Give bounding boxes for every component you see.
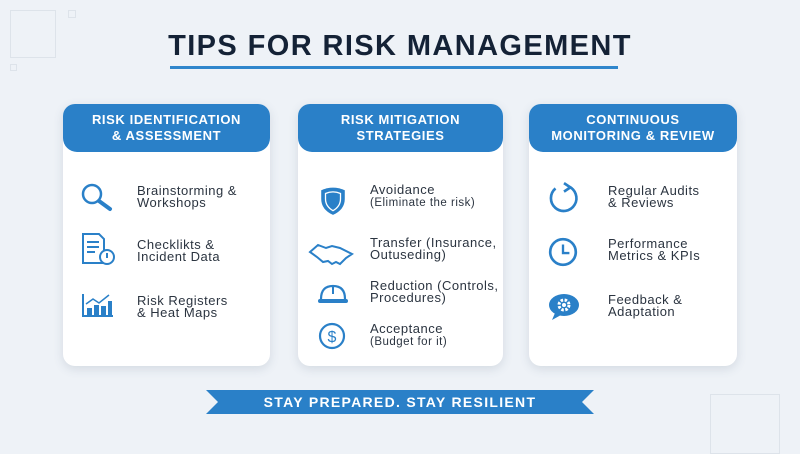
icon: clock bbox=[548, 238, 578, 266]
item text: Procedures) bbox=[370, 290, 446, 305]
item text: Reduction (Controls, bbox=[370, 278, 498, 293]
icon: document bbox=[82, 233, 115, 265]
header: CONTINUOUS bbox=[586, 112, 680, 127]
item text bbox=[137, 183, 237, 210]
icon: gear bubble bbox=[549, 294, 579, 320]
icon: magnifier bbox=[82, 184, 112, 212]
header bbox=[529, 104, 737, 152]
header: RISK IDENTIFICATION bbox=[92, 112, 241, 127]
header bbox=[298, 104, 503, 152]
panel: monitoring bbox=[529, 104, 737, 366]
item text: Incident Data bbox=[137, 249, 220, 264]
header: MONITORING & REVIEW bbox=[551, 128, 715, 143]
item text: Outuseding) bbox=[370, 247, 446, 262]
title underline bbox=[170, 66, 618, 69]
item text: Metrics & KPIs bbox=[608, 248, 700, 263]
item text: Checklikts & bbox=[137, 237, 215, 252]
item text: Adaptation bbox=[608, 304, 675, 319]
header: & ASSESSMENT bbox=[112, 128, 221, 143]
item text: Transfer (Insurance, bbox=[370, 235, 497, 250]
item text bbox=[608, 183, 700, 210]
item text: Workshops bbox=[137, 195, 206, 210]
item text bbox=[370, 235, 497, 262]
banner: STAY PREPARED. STAY RESILIENT bbox=[264, 394, 536, 410]
item text bbox=[370, 182, 475, 209]
icon: handshake bbox=[308, 244, 354, 266]
item text bbox=[370, 321, 447, 348]
banner bbox=[206, 390, 594, 414]
header: STRATEGIES bbox=[356, 128, 445, 143]
item text: (Eliminate the risk) bbox=[370, 197, 475, 209]
item text bbox=[137, 293, 228, 320]
icon: dollar bbox=[318, 322, 346, 350]
header: RISK MITIGATION bbox=[341, 112, 460, 127]
decoration: squares bbox=[10, 10, 56, 58]
item text: Performance bbox=[608, 236, 688, 251]
item text bbox=[608, 236, 700, 263]
icon: refresh bbox=[550, 182, 578, 212]
panel: mitigation bbox=[298, 104, 503, 366]
item text: Risk Registers bbox=[137, 293, 228, 308]
item text: & Heat Maps bbox=[137, 305, 218, 320]
icon: shield bbox=[321, 188, 345, 215]
item text: & Reviews bbox=[608, 195, 674, 210]
icon: dollar: $ bbox=[328, 329, 337, 346]
item text: Feedback & bbox=[608, 292, 682, 307]
title: TIPS FOR RISK MANAGEMENT bbox=[168, 30, 632, 62]
item text: Acceptance bbox=[370, 321, 443, 336]
item text: Regular Audits bbox=[608, 183, 700, 198]
header bbox=[63, 104, 270, 152]
item text: Avoidance bbox=[370, 182, 435, 197]
icon: chart bbox=[82, 294, 113, 317]
item text bbox=[137, 237, 220, 264]
icon: helmet bbox=[318, 284, 348, 303]
item text bbox=[608, 292, 682, 319]
item text: Brainstorming & bbox=[137, 183, 237, 198]
panel: identification bbox=[63, 104, 270, 366]
item text bbox=[370, 278, 498, 305]
decoration: bottom right bbox=[710, 394, 780, 454]
item text: (Budget for it) bbox=[370, 336, 447, 348]
